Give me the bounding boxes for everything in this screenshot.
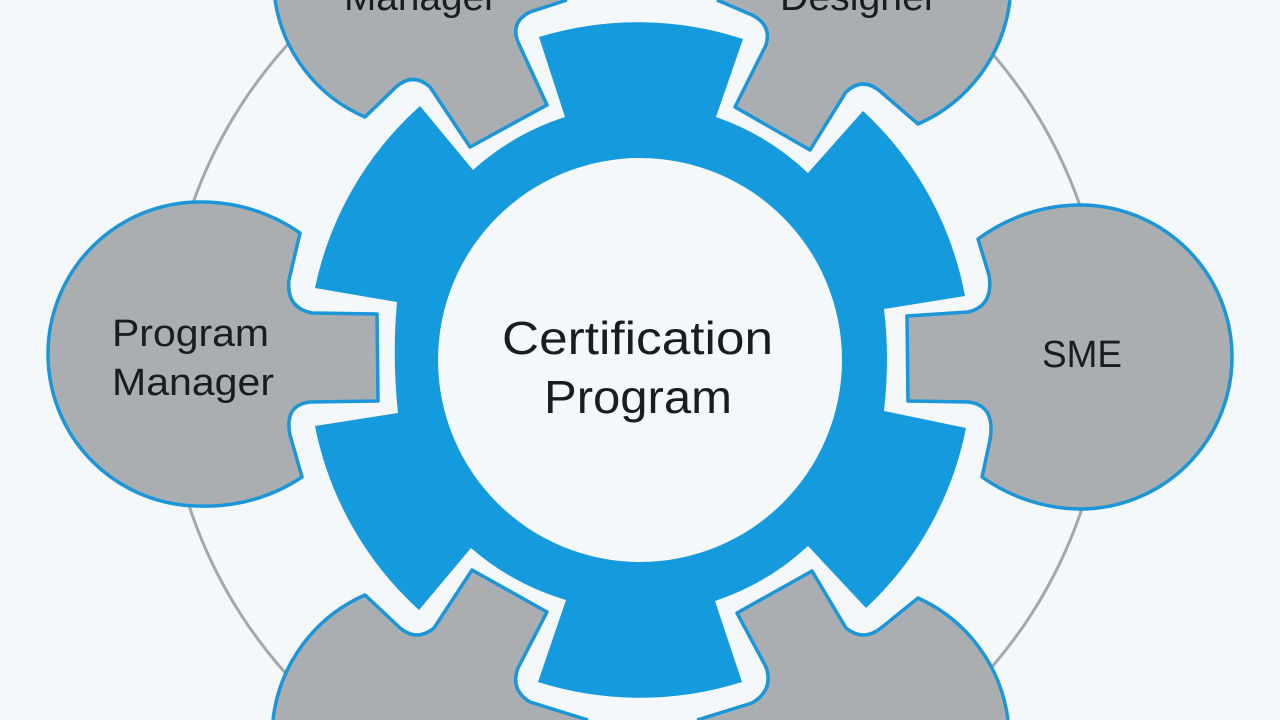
panel: top-right role, Designer bbox=[717, 0, 1010, 150]
panel: bottom-left role bbox=[273, 570, 588, 720]
center circle: Certification Program bbox=[438, 158, 842, 562]
panel: top-left role, Manager bbox=[275, 0, 567, 147]
label: Program Manager: Manager bbox=[112, 362, 274, 404]
center label bbox=[502, 312, 773, 423]
label: SME: SME bbox=[1042, 334, 1122, 376]
center label: Certification bbox=[502, 312, 773, 364]
label: Program Manager bbox=[112, 313, 274, 404]
center label: Program bbox=[544, 371, 732, 423]
panel: bottom-right role bbox=[697, 571, 1008, 720]
label: Program Manager: Program bbox=[112, 313, 269, 355]
central gear bbox=[315, 22, 966, 698]
panel: right role, SME bbox=[907, 205, 1232, 509]
panel: left role, Program Manager bbox=[48, 202, 378, 506]
